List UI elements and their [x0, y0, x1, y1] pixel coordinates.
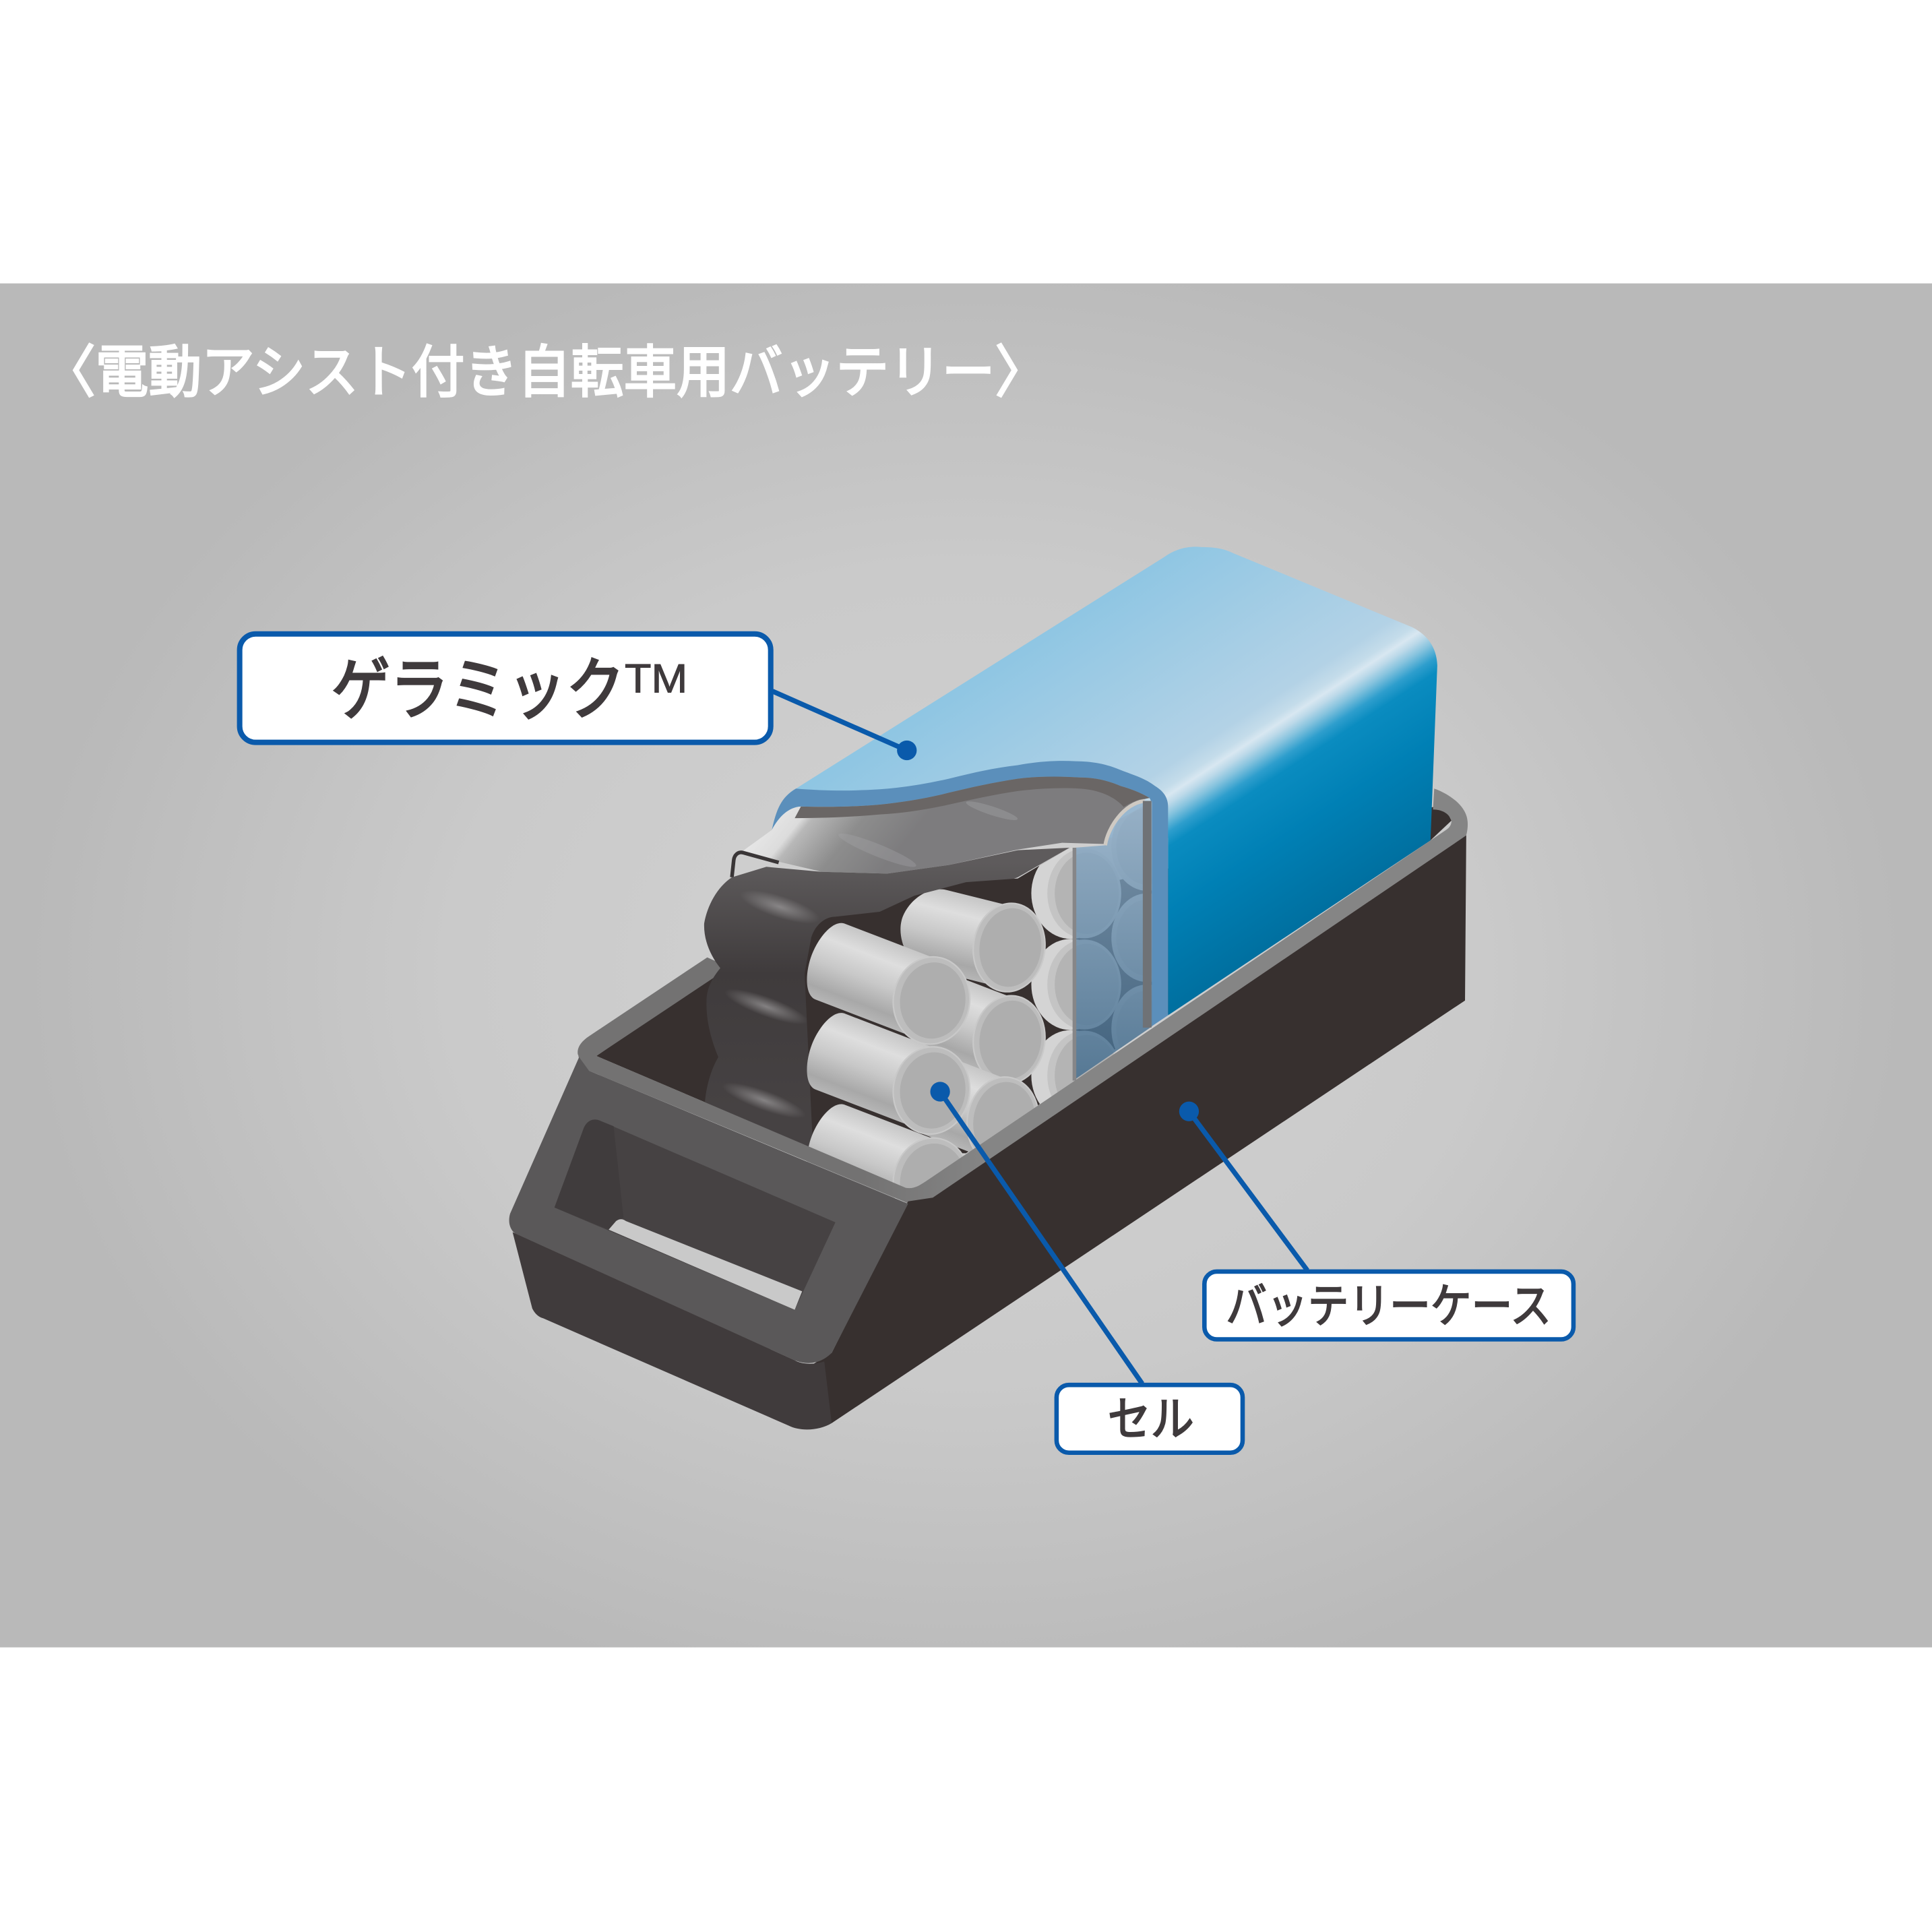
wrap highlights — [737, 883, 823, 931]
leader dot — [897, 741, 916, 760]
dark wrap around the cells — [704, 848, 1074, 1153]
cell row 1 top — [807, 923, 930, 1034]
cells behind panel, outer row — [1111, 803, 1152, 1049]
case back-left rim — [578, 958, 729, 1056]
leader line — [940, 1092, 1142, 1383]
cell row 3 — [1031, 848, 1080, 939]
trademark: TM — [625, 656, 687, 702]
leader line — [1189, 1111, 1307, 1270]
cut-edge band — [772, 761, 1168, 1026]
label text: セル — [1108, 1393, 1194, 1445]
label box — [1204, 1272, 1573, 1340]
translucent panel — [1073, 801, 1152, 1081]
label text: ゲラミック — [332, 653, 625, 728]
cells — [807, 803, 1152, 1204]
case front face — [509, 1057, 908, 1363]
callout: バッテリーケース — [1179, 1102, 1573, 1340]
cell row 2 — [900, 890, 1003, 984]
label text: バッテリーケース — [1226, 1280, 1551, 1332]
wire handle — [732, 852, 779, 877]
sheath over the cells — [741, 777, 1150, 873]
cell row 1 middle — [807, 1013, 929, 1124]
leader line — [772, 691, 907, 751]
ゲラミック blue block — [772, 547, 1437, 1026]
leader dot — [1179, 1102, 1199, 1121]
case interior — [596, 807, 1452, 1188]
callout: セル — [930, 1082, 1243, 1453]
battery illustration — [509, 547, 1468, 1429]
title: 〈電動アシスト付き自転車用バッテリー〉 — [42, 340, 1048, 404]
case rim — [578, 788, 1468, 1204]
callout: ゲラミック — [240, 634, 916, 760]
label box — [1057, 1385, 1243, 1453]
case bottom face — [513, 1232, 832, 1429]
handle window — [555, 1119, 836, 1310]
label box — [240, 634, 771, 743]
background panel — [0, 284, 1932, 1648]
leader dot — [930, 1082, 950, 1102]
case right wall — [807, 836, 1466, 1423]
cell row 1 bottom — [807, 1104, 930, 1198]
